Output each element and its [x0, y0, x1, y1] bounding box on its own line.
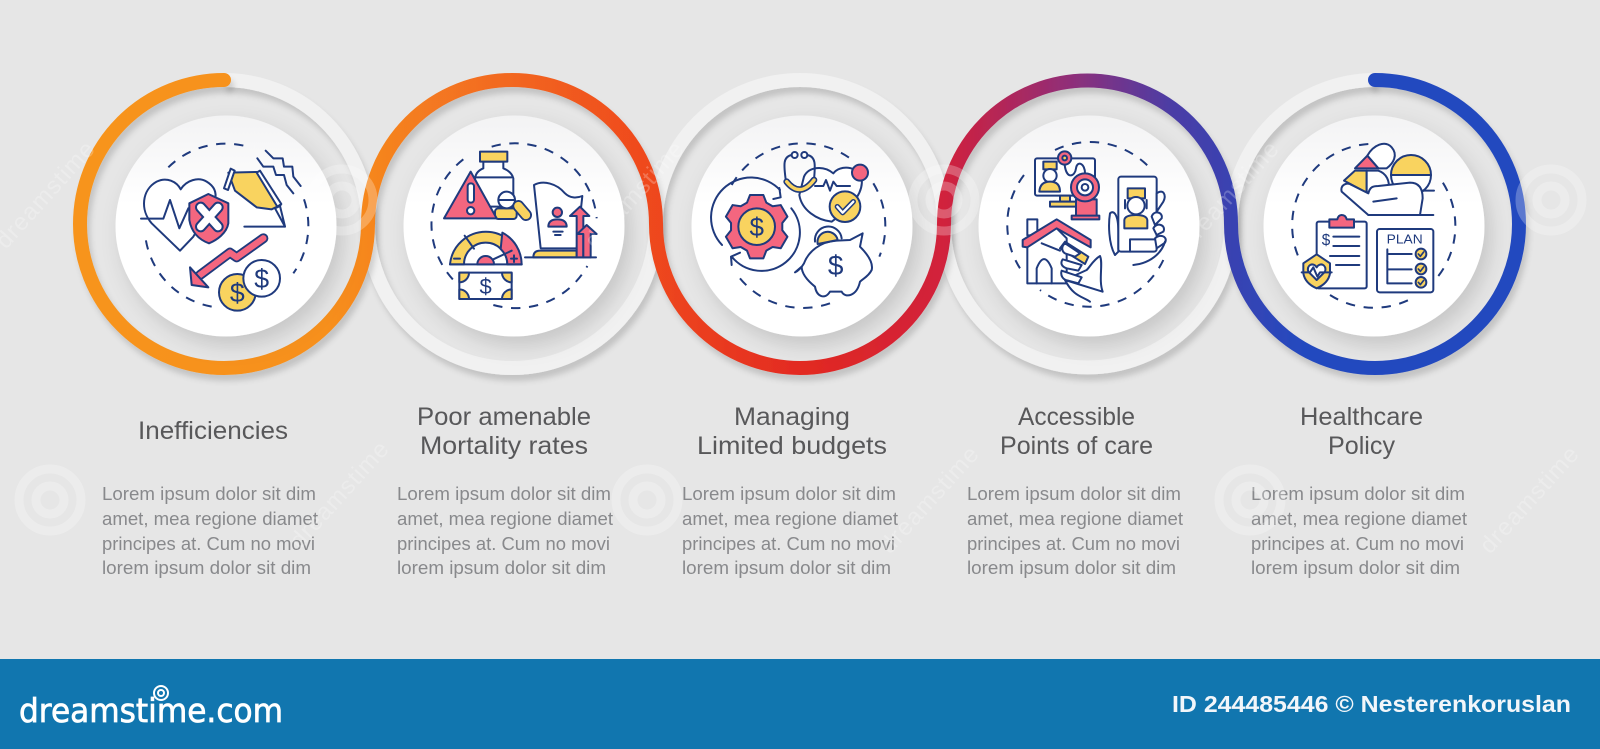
title: managing limited budgets: Managing — [734, 403, 850, 431]
body text: column 3: principes at. Cum no movi — [682, 533, 895, 554]
icon: managing limited budgets — [711, 143, 885, 308]
body text: column 4 — [967, 483, 1183, 578]
icon: healthcare policy: $ — [1322, 232, 1331, 249]
watermark text: dreamstime — [874, 440, 985, 559]
coloured gradient wave line — [80, 80, 1519, 368]
body text: column 1: Lorem ipsum dolor sit dim — [102, 483, 316, 504]
image id and author credit: ID 244485446 © Nesterenkoruslan — [1172, 691, 1571, 717]
body text: column 5: principes at. Cum no movi — [1251, 533, 1464, 554]
watermark text: dreamstime — [284, 435, 395, 554]
title: accessible points of care: Accessible — [1018, 403, 1135, 431]
body text: column 3: Lorem ipsum dolor sit dim — [682, 483, 896, 504]
title: healthcare policy: Policy — [1328, 432, 1396, 460]
footer band — [0, 659, 1600, 749]
icon: inefficiencies: $ — [254, 264, 269, 294]
ghost ring arcs — [224, 80, 1375, 368]
logo spiral — [154, 686, 168, 700]
body text: column 4: principes at. Cum no movi — [967, 533, 1180, 554]
title: inefficiencies: Inefficiencies — [138, 417, 288, 445]
watermark text: dreamstime — [1474, 440, 1585, 559]
body text: column 3: lorem ipsum dolor sit dim — [682, 557, 891, 578]
body text: column 2: lorem ipsum dolor sit dim — [397, 557, 606, 578]
loop rings — [80, 80, 1519, 368]
body text: column 2 — [397, 483, 613, 578]
watermark spirals — [19, 169, 1582, 531]
icon: poor amenable mortality rates — [431, 143, 597, 308]
body text: column 1: amet, mea regione diamet — [102, 508, 318, 529]
icon: accessible points of care — [1007, 142, 1166, 307]
body text: column 4: lorem ipsum dolor sit dim — [967, 557, 1176, 578]
title: healthcare policy: Healthcare — [1300, 403, 1423, 431]
icon: inefficiencies: $ — [230, 278, 245, 308]
body text: column 4: Lorem ipsum dolor sit dim — [967, 483, 1181, 504]
title: accessible points of care: Points of care — [1000, 432, 1153, 460]
watermark text: dreamstime — [1174, 135, 1285, 254]
body text: column 3: amet, mea regione diamet — [682, 508, 898, 529]
watermark text: dreamstime — [579, 135, 690, 254]
title: poor amenable mortality rates: Poor amenable — [417, 403, 591, 431]
title: poor amenable mortality rates — [417, 403, 591, 460]
title: accessible points of care — [1000, 403, 1153, 460]
icon: healthcare policy — [1292, 144, 1455, 308]
body text: column 5: amet, mea regione diamet — [1251, 508, 1467, 529]
body text: column 4: amet, mea regione diamet — [967, 508, 1183, 529]
body text: column 5: lorem ipsum dolor sit dim — [1251, 557, 1460, 578]
body text: column 1: lorem ipsum dolor sit dim — [102, 557, 311, 578]
icon: managing limited budgets: $ — [828, 250, 844, 281]
title: managing limited budgets: Limited budgets — [697, 432, 887, 460]
watermark text — [0, 135, 1585, 559]
icon: healthcare policy: PLAN — [1387, 233, 1423, 247]
logo text: dreamstime.com — [19, 691, 283, 730]
body text: column 2: amet, mea regione diamet — [397, 508, 613, 529]
body text: column 5 — [1251, 483, 1467, 578]
body text: column 1 — [102, 483, 318, 578]
body text: column 5: Lorem ipsum dolor sit dim — [1251, 483, 1465, 504]
icon: managing limited budgets: $ — [749, 212, 764, 242]
title: healthcare policy — [1300, 403, 1423, 460]
icon: poor amenable mortality rates: $ — [480, 274, 492, 299]
icon: inefficiencies — [141, 144, 308, 311]
body text: column 2: principes at. Cum no movi — [397, 533, 610, 554]
body text: column 2: Lorem ipsum dolor sit dim — [397, 483, 611, 504]
white discs — [116, 116, 1484, 336]
title: managing limited budgets — [697, 403, 887, 460]
body text: column 1: principes at. Cum no movi — [102, 533, 315, 554]
body text: column 3 — [682, 483, 898, 578]
title: poor amenable mortality rates: Mortality rates — [420, 432, 588, 460]
